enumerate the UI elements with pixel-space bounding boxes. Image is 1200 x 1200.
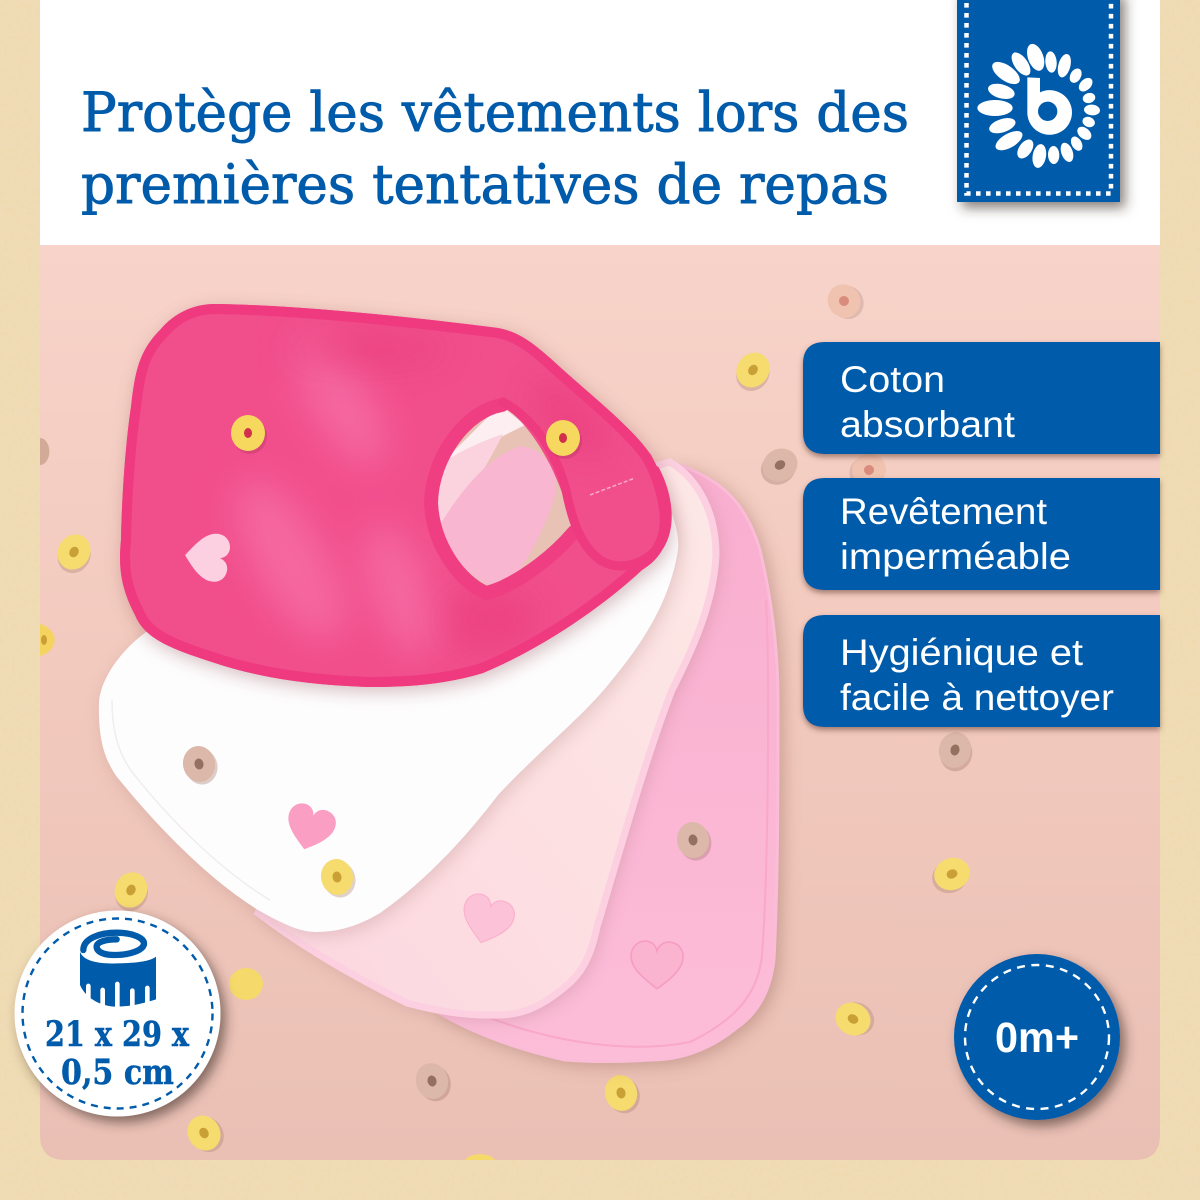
cereal: yellow lower left: [108, 867, 155, 917]
cereal: pink top right: [821, 277, 870, 327]
feature band: waterproof coating: imperméable: [840, 536, 1071, 577]
cereal: tan right: [934, 728, 977, 775]
photo panel: [40, 245, 1160, 1160]
feature band: absorbent cotton: Coton: [840, 359, 945, 400]
age text: 0m+: [995, 1014, 1079, 1062]
size badge: [14, 910, 220, 1116]
cereal: yellow upper: [728, 346, 778, 398]
cereal: yellow plain: [229, 968, 263, 1000]
cereal: yellow left: [50, 528, 99, 579]
cereal on white bib: yellow: [318, 856, 358, 900]
cereal: yellow bottom middle: [601, 1071, 644, 1117]
feature band: hygienic: [803, 615, 1160, 727]
title: premières tentatives de repas: [81, 153, 889, 216]
feature band: waterproof coating: Revêtement: [840, 491, 1048, 532]
heart on pale pink bib: [456, 891, 518, 949]
neck strap: [503, 402, 667, 566]
size text: 21 x 29 x: [45, 1014, 190, 1055]
cereal on hot pink bib: strap: [546, 420, 582, 459]
heart on hot pink bib: [183, 531, 231, 583]
cereal: yellow lower right: [829, 994, 880, 1043]
cereal: cut off at bottom: [465, 1154, 495, 1160]
logo flower mark: [977, 42, 1100, 169]
icon: tape measure: [80, 933, 156, 1010]
bib: white: [99, 480, 681, 936]
title: [81, 81, 909, 216]
age badge: [954, 954, 1120, 1120]
heart on white bib: [281, 800, 339, 855]
cereal: left edge tan: [40, 438, 49, 465]
logo stitching: [966, 3, 1111, 194]
heart on medium pink bib: [631, 941, 683, 989]
size text: 0,5 cm: [61, 1052, 174, 1093]
strap stitch: [590, 478, 635, 495]
feature band: absorbent cotton: [803, 342, 1160, 454]
cereal: yellow right: [927, 853, 975, 898]
size text: [45, 1014, 190, 1093]
scattered cereal rings on background: [40, 277, 977, 1160]
cereal: yellow left edge: [40, 624, 55, 656]
feature band: waterproof coating: [803, 478, 1160, 590]
bib: pale pink: [258, 462, 719, 1019]
cereal: yellow bottom: [181, 1108, 230, 1159]
cereal on hot pink bib: left: [231, 415, 267, 454]
cereal: tan bottom: [412, 1059, 455, 1105]
neck opening: [425, 405, 574, 593]
bib: medium pink: [434, 465, 783, 1066]
stack of bibs: [99, 295, 783, 1066]
cereal on medium pink bib: [675, 820, 714, 863]
cereal: tan: [754, 442, 805, 491]
bib: hot pink with neck opening: [110, 295, 680, 695]
feature band: absorbent cotton: absorbant: [840, 404, 1016, 445]
header panel: [40, 0, 1160, 245]
terry highlights: [232, 338, 439, 653]
title: Protège les vêtements lors des: [81, 81, 909, 144]
cereal: pink behind band: [847, 451, 889, 491]
brand logo tag: [957, 0, 1120, 202]
feature band: hygienic: Hygiénique et: [840, 632, 1084, 673]
feature band: hygienic: facile à nettoyer: [840, 677, 1114, 718]
cereal on white bib: tan: [180, 743, 220, 787]
